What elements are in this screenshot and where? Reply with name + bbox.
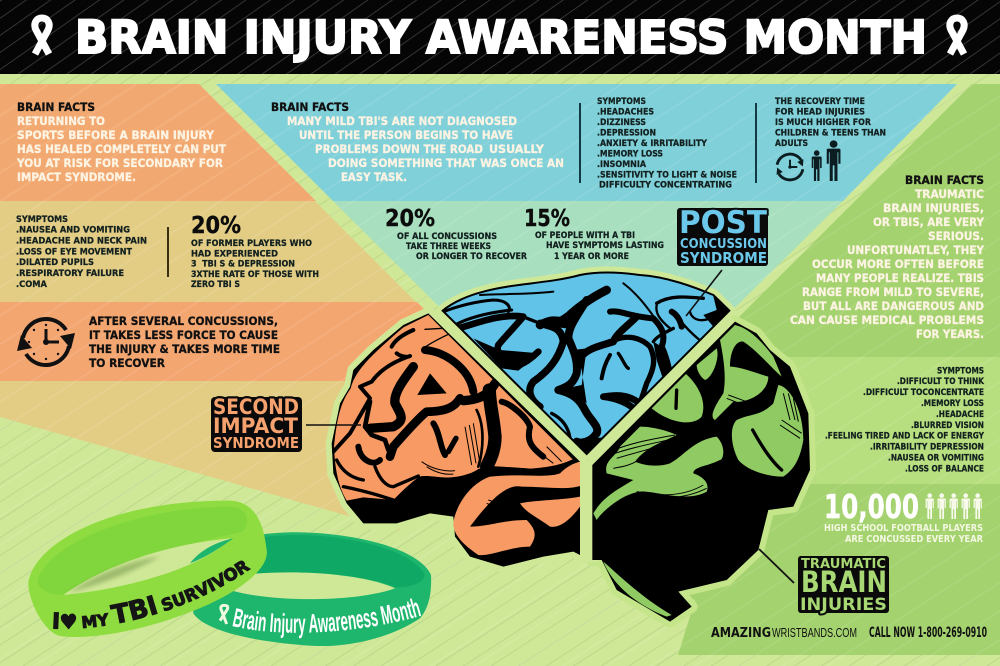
stat: 20% of all concussions: TAKE THREE WEEKS — [406, 242, 491, 252]
panel: header band — [0, 0, 1000, 74]
symptoms list: post concussion: SYMPTOMS — [597, 97, 646, 107]
symptoms list: second impact: .COMA — [16, 280, 47, 290]
panel: post concussion brain facts: EASY TASK. — [341, 170, 407, 184]
icon: ribbon left — [35, 18, 49, 54]
symptoms list: traumatic brain injury: .NAUSEA OR VOMITING — [888, 454, 984, 464]
symptoms list: post concussion: .MEMORY LOSS — [597, 150, 663, 160]
icon: five people — [926, 493, 982, 519]
symptoms list: second impact: .NAUSEA AND VOMITING — [16, 226, 130, 236]
stat: 15% of people with a TBI: 1 YEAR OR MORE — [554, 252, 629, 262]
panel: second impact brain facts: IMPACT SYNDROME. — [17, 170, 136, 184]
callout: after several concussions: TO RECOVER — [89, 356, 165, 370]
panel: post concussion brain facts: UNTIL THE PERSON BEGINS TO HAVE — [299, 128, 513, 142]
label: post concussion syndrome — [677, 205, 768, 267]
stat: 10,000 players: 10,000 — [824, 487, 919, 526]
arrow: post concussion pointer — [686, 270, 722, 316]
stat: 15% of people with a TBI: HAVE SYMPTOMS LASTING — [546, 241, 664, 251]
symptoms list: post concussion — [597, 97, 737, 190]
text block: recovery time: ADULTS — [775, 139, 808, 149]
panel: second impact brain facts: YOU AT RISK FOR SECONDARY FOR — [16, 156, 223, 170]
text block: recovery time — [775, 97, 886, 149]
stat: 20% of former players: HAD EXPERIENCED — [191, 250, 278, 260]
symptoms list: traumatic brain injury: .HEADACHE — [936, 410, 984, 420]
stat: 20% of all concussions: OR LONGER TO RECOVER — [416, 252, 527, 262]
divider — [755, 103, 757, 183]
symptoms list: traumatic brain injury: .DIFFICULT TO THINK — [897, 377, 984, 387]
symptoms list: post concussion: .SENSITIVITY TO LIGHT & NOISE — [597, 170, 737, 180]
symptoms list: traumatic brain injury: .IRRITABILITY DEPRESSION — [870, 443, 984, 453]
label: post concussion syndrome: SYNDROME — [680, 249, 767, 267]
stat: 20% of former players: 3XTHE RATE OF THOSE WITH — [191, 270, 319, 280]
callout: after several concussions — [89, 314, 280, 370]
stat: 20% of all concussions: OF ALL CONCUSSIONS — [397, 232, 497, 242]
symptoms list: second impact: .DILATED PUPILS — [16, 258, 94, 268]
symptoms list: post concussion: .INSOMNIA — [597, 160, 646, 170]
footer: website and phone: WRISTBANDS.COM — [772, 625, 857, 640]
label: traumatic brain injuries: INJURIES — [800, 595, 887, 615]
panel: post concussion brain facts: USUALLY — [489, 142, 545, 156]
label: post concussion syndrome: POST — [679, 205, 767, 241]
stat: 15% of people with a TBI — [524, 206, 664, 262]
symptoms list: post concussion: DIFFICULTY CONCENTRATING — [599, 180, 732, 190]
label: second impact syndrome — [211, 395, 302, 452]
arrow: second impact pointer — [306, 424, 361, 426]
label: second impact syndrome: SECOND — [213, 395, 299, 419]
text block: recovery time: FOR HEAD INJURIES — [775, 108, 865, 118]
panel: traumatic brain facts: MANY PEOPLE REALIZE. TBIS — [816, 271, 984, 285]
symptoms list: post concussion: .DEPRESSION — [597, 128, 656, 138]
panel: second impact brain facts: BRAIN FACTS — [17, 100, 95, 114]
symptoms list: traumatic brain injury: .DIFFICULT TOCONCENTRATE — [863, 388, 984, 398]
label: traumatic brain injuries — [798, 556, 889, 615]
stat: 20% of former players — [191, 213, 319, 290]
footer: website and phone — [711, 625, 987, 641]
wristband: green awareness month: Brain Injury Awareness Month — [232, 598, 422, 638]
label: second impact syndrome: SYNDROME — [213, 434, 299, 452]
brain halo — [332, 272, 810, 622]
panel: second impact brain facts — [16, 100, 226, 184]
panel: traumatic brain facts: CAN CAUSE MEDICAL PROBLEMS — [790, 313, 984, 327]
stat: 10,000 players — [824, 487, 984, 545]
panel: second impact brain facts: RETURNING TO — [17, 114, 105, 128]
label: post concussion syndrome: CONCUSSION — [680, 237, 767, 252]
icon: clock small — [777, 154, 803, 180]
symptoms list: second impact: .RESPIRATORY FAILURE — [16, 269, 124, 279]
callout: after several concussions: THE INJURY & TAKES MORE TIME — [89, 342, 280, 356]
panel: second impact brain facts: HAS HEALED COMPLETELY CAN PUT — [17, 142, 226, 156]
symptoms list: post concussion: .DIZZINESS — [597, 118, 646, 128]
label: traumatic brain injuries: BRAIN — [801, 565, 887, 599]
panel: post concussion brain facts: DOING SOMETHING THAT WAS ONCE AN — [328, 156, 564, 170]
panel: post concussion brain facts: BRAIN FACTS — [271, 100, 349, 114]
icon: child and adult — [812, 140, 840, 181]
panel: post concussion brain facts: PROBLEMS DOWN THE ROAD — [315, 142, 483, 156]
callout: after several concussions: AFTER SEVERAL CONCUSSIONS, — [89, 314, 278, 328]
stat: 20% of all concussions — [385, 206, 527, 262]
panel: traumatic brain facts: SERIOUS. — [928, 229, 984, 243]
footer: website and phone: AMAZING — [711, 626, 771, 641]
panel: traumatic brain facts: OCCUR MORE OFTEN BEFORE — [812, 257, 984, 271]
panel: traumatic brain facts: UNFORTUNATLEY, THEY — [847, 243, 985, 257]
brain lobe: orange second impact — [332, 313, 580, 567]
panel: traumatic brain facts: BRAIN FACTS — [905, 173, 984, 187]
stat: 20% of all concussions: 20% — [385, 206, 435, 232]
symptoms list: traumatic brain injury — [825, 366, 985, 474]
symptoms list: second impact: SYMPTOMS — [16, 215, 68, 225]
wristband: lime TBI survivor: I♥ MY TBI SURVIVOR — [53, 560, 251, 630]
panel: second impact brain facts: SPORTS BEFORE A BRAIN INJURY — [17, 128, 215, 142]
panel: post concussion brain facts: MANY MILD TBI'S ARE NOT DIAGNOSED — [287, 114, 517, 128]
icon: ribbon right — [950, 18, 964, 54]
callout: after several concussions: IT TAKES LESS FORCE TO CAUSE — [89, 328, 278, 342]
stat: 15% of people with a TBI: OF PEOPLE WITH A TBI — [535, 231, 635, 241]
text block: recovery time: IS MUCH HIGHER FOR — [775, 118, 871, 128]
symptoms list: traumatic brain injury: SYMPTOMS — [937, 366, 984, 376]
wristband: lime TBI survivor — [28, 500, 267, 637]
symptoms list: second impact — [16, 215, 147, 290]
panel: traumatic brain facts: BRAIN INJURIES, — [883, 201, 984, 215]
text block: recovery time: THE RECOVERY TIME — [775, 97, 865, 107]
symptoms list: second impact: .HEADACHE AND NECK PAIN — [16, 236, 147, 246]
divider — [167, 227, 169, 277]
text block: recovery time: CHILDREN & TEENS THAN — [775, 128, 886, 138]
icon: clock large — [17, 319, 75, 365]
panel: traumatic brain facts: BUT ALL ARE DANGEROUS AND — [803, 299, 984, 313]
symptoms list: traumatic brain injury: .BLURRED VISION — [911, 421, 984, 431]
label: traumatic brain injuries: TRAUMATIC — [801, 557, 886, 572]
panel: traumatic brain facts: RANGE FROM MILD TO SEVERE, — [802, 285, 984, 299]
symptoms list: post concussion: .ANXIETY & IRRITABILITY — [597, 139, 708, 149]
panel: traumatic brain facts: OR TBIS, ARE VERY — [873, 215, 985, 229]
divider — [579, 103, 581, 183]
panel: traumatic brain facts — [790, 173, 985, 341]
symptoms list: second impact: .LOSS OF EYE MOVEMENT — [16, 248, 132, 258]
symptoms list: traumatic brain injury: .MEMORY LOSS — [921, 399, 984, 409]
label: second impact syndrome: IMPACT — [213, 414, 299, 438]
symptoms list: traumatic brain injury: .LOSS OF BALANCE — [905, 464, 984, 474]
panel: traumatic brain facts: FOR YEARS. — [916, 327, 984, 341]
panel: post concussion brain facts — [271, 100, 564, 184]
title: BRAIN INJURY AWARENESS MONTH — [75, 11, 927, 64]
stat: 15% of people with a TBI: 15% — [524, 206, 570, 232]
brain lobe: blue post concussion — [443, 272, 729, 454]
stat: 20% of former players: ZERO TBI S — [191, 280, 240, 290]
arrow: traumatic brain injuries pointer — [759, 549, 794, 583]
symptoms list: post concussion: .HEADACHES — [597, 108, 654, 118]
stat: 20% of former players: 20% — [191, 213, 241, 239]
wristband: green awareness month — [193, 532, 432, 646]
stat: 20% of former players: 3 TBI S & DEPRESSION — [191, 260, 295, 270]
stat: 10,000 players: ARE CONCUSSED EVERY YEAR — [845, 534, 984, 545]
panel: traumatic brain facts: TRAUMATIC — [915, 187, 984, 201]
brain lobe: green traumatic — [592, 322, 810, 622]
stat: 20% of former players: OF FORMER PLAYERS WHO — [191, 239, 312, 249]
